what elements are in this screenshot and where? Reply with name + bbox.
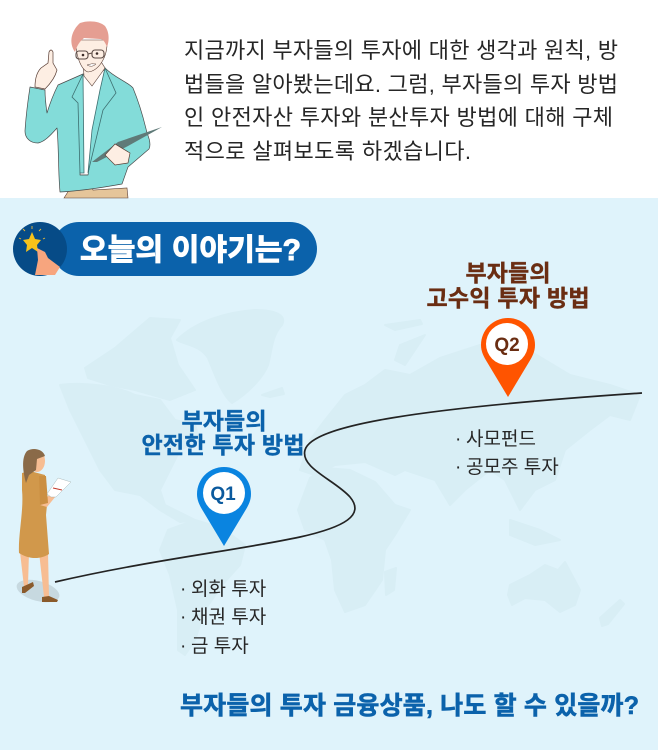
list: safe investing items: 금 투자 — [191, 635, 249, 657]
pin: Q1 — [197, 467, 251, 546]
pin: Q2 — [481, 318, 535, 397]
heading: high yield investing: 부자들의 — [466, 260, 550, 286]
world map background — [60, 310, 640, 655]
trousers — [64, 173, 128, 198]
heading: safe investing — [142, 408, 304, 458]
heading: today's story pill: 오늘의 이야기는? — [80, 234, 301, 267]
closing question: 부자들의 투자 금융상품, 나도 할 수 있을까? — [180, 692, 639, 720]
shoes — [22, 582, 34, 593]
glasses — [76, 50, 104, 59]
hand on folder — [105, 144, 130, 165]
dress — [19, 471, 49, 558]
head — [29, 450, 45, 472]
shirt — [78, 70, 112, 175]
pin: Q1: Q1 — [210, 484, 236, 505]
list: safe investing items: · — [180, 607, 186, 628]
path line — [55, 393, 642, 582]
neck — [83, 60, 105, 86]
list: high yield items: 공모주 투자 — [466, 456, 559, 478]
list: high yield items: · — [455, 429, 461, 450]
heading: today's story pill — [13, 222, 317, 276]
heading: high yield investing — [426, 260, 590, 311]
hair — [23, 449, 45, 483]
intro text block: 인 안전자산 투자와 분산투자 방법에 대해 구체 — [184, 105, 613, 130]
list: safe investing items — [180, 578, 266, 657]
folder — [92, 127, 162, 162]
intro text block — [184, 38, 618, 164]
illustration: man pointing up with folder — [25, 21, 162, 198]
jacket — [25, 68, 150, 192]
heading: safe investing: 안전한 투자 방법 — [142, 432, 304, 458]
illustration: woman reading document — [14, 449, 71, 606]
panel: light blue background — [0, 198, 658, 750]
raised hand — [35, 50, 57, 89]
arm — [40, 489, 60, 507]
heading: safe investing: 부자들의 — [182, 408, 266, 434]
list: high yield items — [455, 428, 559, 478]
legs — [20, 552, 29, 587]
list: safe investing items: · — [180, 579, 186, 600]
list: safe investing items: 외화 투자 — [191, 578, 266, 600]
list: safe investing items: 채권 투자 — [191, 606, 266, 628]
intro text block: 지금까지 부자들의 투자에 대한 생각과 원칙, 방 — [184, 38, 618, 63]
document — [47, 478, 71, 497]
list: high yield items: 사모펀드 — [466, 428, 536, 450]
list: safe investing items: · — [180, 636, 186, 657]
list: high yield items: · — [455, 457, 461, 478]
intro text block: 법들을 알아봤는데요. 그럼, 부자들의 투자 방법 — [184, 72, 618, 97]
face — [76, 40, 107, 72]
heading: high yield investing: 고수익 투자 방법 — [426, 285, 590, 311]
panel: top intro background — [0, 0, 658, 198]
icon: star and pointing hand — [13, 222, 67, 276]
hair — [71, 21, 109, 52]
pin: Q2: Q2 — [494, 335, 520, 356]
lapels — [72, 74, 84, 173]
intro text block: 적으로 살펴보도록 하겠습니다. — [184, 139, 471, 164]
